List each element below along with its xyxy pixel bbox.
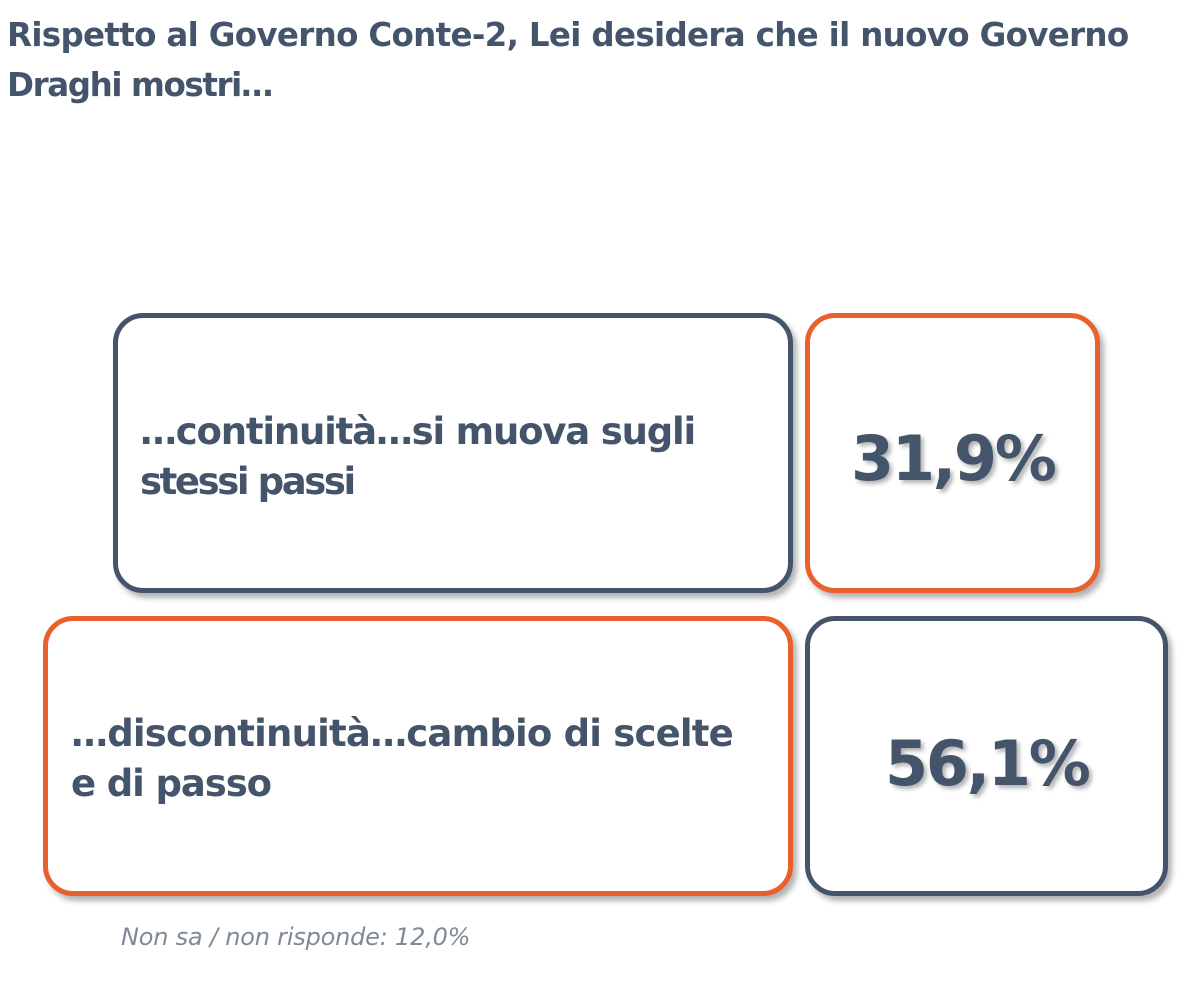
panel: discontinuity label (43, 616, 793, 896)
panel: discontinuity value (805, 616, 1168, 896)
value: 56,1%: 56,1% (885, 727, 1089, 800)
text: continuity (140, 410, 695, 503)
text: discontinuity: …discontinuità…cambio di scelte (71, 712, 733, 755)
panel: continuity value (805, 313, 1100, 593)
value: 31,9%: 31,9% (851, 422, 1055, 495)
text: continuity: …continuità…si muova sugli (140, 410, 695, 453)
title: Rispetto al Governo Conte-2, Lei desidera che il nuovo Governo (7, 16, 1129, 54)
footnote: Non sa / non risponde: 12,0% (121, 923, 470, 951)
title: Draghi mostri… (7, 66, 272, 104)
text: discontinuity: e di passo (71, 762, 271, 805)
panel: continuity label (113, 313, 793, 593)
text: discontinuity (71, 712, 733, 805)
text: continuity: stessi passi (140, 460, 354, 503)
title (7, 16, 1129, 104)
